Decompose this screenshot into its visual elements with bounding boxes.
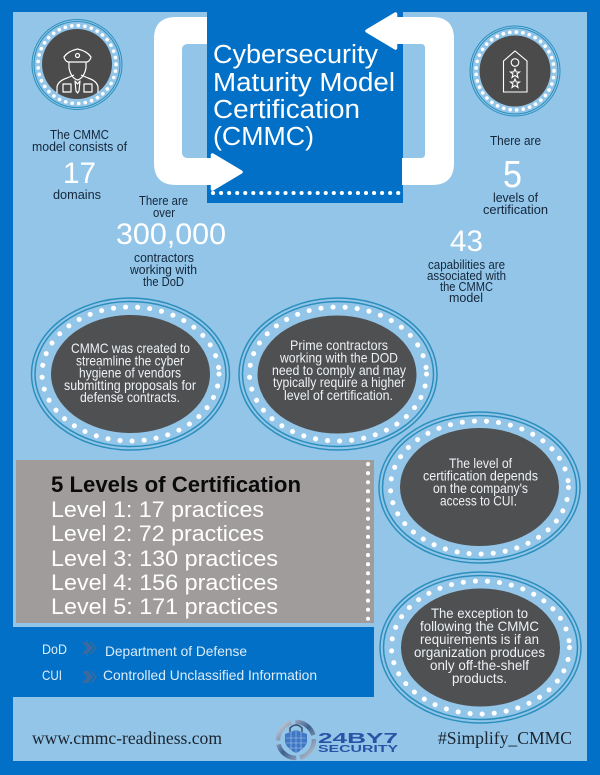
- stat: 300,000 contractors: [116, 193, 226, 289]
- hashtag: #Simplify_CMMC: [438, 728, 572, 748]
- title: (CMMC): [213, 123, 314, 151]
- stat: 43 capabilities: capabilities are: [428, 257, 505, 272]
- callout text: level of certification.: [284, 388, 393, 403]
- icon: rank insignia: [504, 51, 527, 92]
- callout: exception: [380, 572, 581, 723]
- callout text: access to CUI.: [440, 494, 517, 508]
- stat: 17 domains: 17: [63, 157, 96, 190]
- level list: Level 5: 171 practices: [51, 594, 278, 619]
- glossary: DoD: Department of Defense: [105, 643, 247, 659]
- title: Cybersecurity: [213, 41, 378, 69]
- stat: 17 domains: The CMMC: [50, 127, 109, 142]
- glossary: DoD: DoD: [42, 641, 67, 657]
- stat: 300,000 contractors: contractors: [134, 250, 194, 265]
- callout: level depends on CUI access: [379, 412, 580, 563]
- dotted rule: [213, 191, 402, 195]
- callout text: need to comply and may: [272, 363, 406, 378]
- callout text: on the company's: [433, 481, 528, 496]
- callout: why CMMC was created: [32, 298, 230, 450]
- callout text: [423, 456, 538, 508]
- callout: prime contractors: [239, 298, 437, 450]
- stat: 43 capabilities: 43: [450, 225, 483, 258]
- callout text: [414, 606, 545, 686]
- glossary: DoD: [42, 641, 247, 659]
- callout text: CMMC was created to: [71, 341, 190, 356]
- stat: 17 domains: model consists of: [32, 139, 127, 154]
- callout text: certification depends: [423, 468, 538, 484]
- panel: glossary: [13, 627, 374, 697]
- stat: 5 levels: levels of: [493, 190, 538, 205]
- callout text: The exception to: [431, 606, 528, 621]
- stat: 5 levels: certification: [483, 202, 548, 217]
- stat: 5 levels: 5: [503, 154, 522, 196]
- logo: 24BY7 Security: [278, 722, 399, 758]
- level list: Level 4: 156 practices: [51, 570, 278, 595]
- callout text: products.: [452, 671, 507, 686]
- glossary: CUI: Controlled Unclassified Information: [103, 667, 317, 683]
- icon: officer medal: [32, 20, 122, 110]
- callout text: defense contracts.: [80, 390, 180, 405]
- stat: 43 capabilities: associated with: [427, 268, 506, 283]
- level list: Level 1: 17 practices: [51, 497, 264, 522]
- icon: rank medal: [470, 26, 560, 116]
- level list: [51, 497, 278, 619]
- callout text: organization produces: [414, 645, 545, 660]
- callout text: requirements is if an: [420, 632, 539, 647]
- glossary: CUI: CUI: [42, 667, 62, 683]
- icon: officer figure: [57, 49, 98, 93]
- callout text: The level of: [449, 456, 512, 471]
- website: www.cmmc-readiness.com: [32, 728, 222, 748]
- panel: 5 levels of certification: [16, 460, 374, 623]
- logo: 24BY7 Security: 24BY7: [318, 730, 398, 747]
- stat: 5 levels: There are: [490, 133, 541, 148]
- stat: 17 domains: domains: [53, 187, 101, 202]
- callout text: Prime contractors: [290, 338, 388, 353]
- callout text: streamline the cyber: [76, 354, 184, 368]
- title: Maturity Model: [213, 69, 395, 97]
- panel heading: 5 Levels of Certification: [51, 472, 301, 497]
- callout text: typically require a higher: [273, 375, 405, 390]
- stat: 17 domains: [32, 127, 127, 202]
- stat: 300,000 contractors: 300,000: [116, 218, 226, 251]
- stat: 5 levels: [483, 133, 548, 217]
- callout text: hygiene of vendors: [79, 366, 181, 380]
- title: Certification: [213, 96, 360, 124]
- callout text: only off-the-shelf: [430, 658, 529, 673]
- callout text: [64, 341, 196, 405]
- stat: 43 capabilities: model: [449, 290, 483, 305]
- callout text: submitting proposals for: [64, 378, 196, 393]
- level list: Level 2: 72 practices: [51, 521, 264, 546]
- level list: Level 3: 130 practices: [51, 546, 278, 571]
- arrow: left bracket: [154, 17, 241, 189]
- callout text: working with the DOD: [279, 350, 398, 366]
- arrow: right bracket: [367, 14, 454, 185]
- title: [213, 41, 395, 151]
- stat: 300,000 contractors: There are: [139, 193, 188, 208]
- callout text: [272, 338, 406, 403]
- title block: [207, 12, 403, 203]
- stat: 300,000 contractors: the DoD: [143, 274, 184, 289]
- stat: 300,000 contractors: working with: [129, 262, 197, 277]
- stat: 300,000 contractors: over: [153, 205, 176, 220]
- logo: 24BY7 Security: SECURITY: [318, 744, 399, 755]
- callout text: following the CMMC: [420, 619, 539, 634]
- stat: 43 capabilities: [427, 225, 506, 305]
- stat: 43 capabilities: the CMMC: [440, 279, 493, 294]
